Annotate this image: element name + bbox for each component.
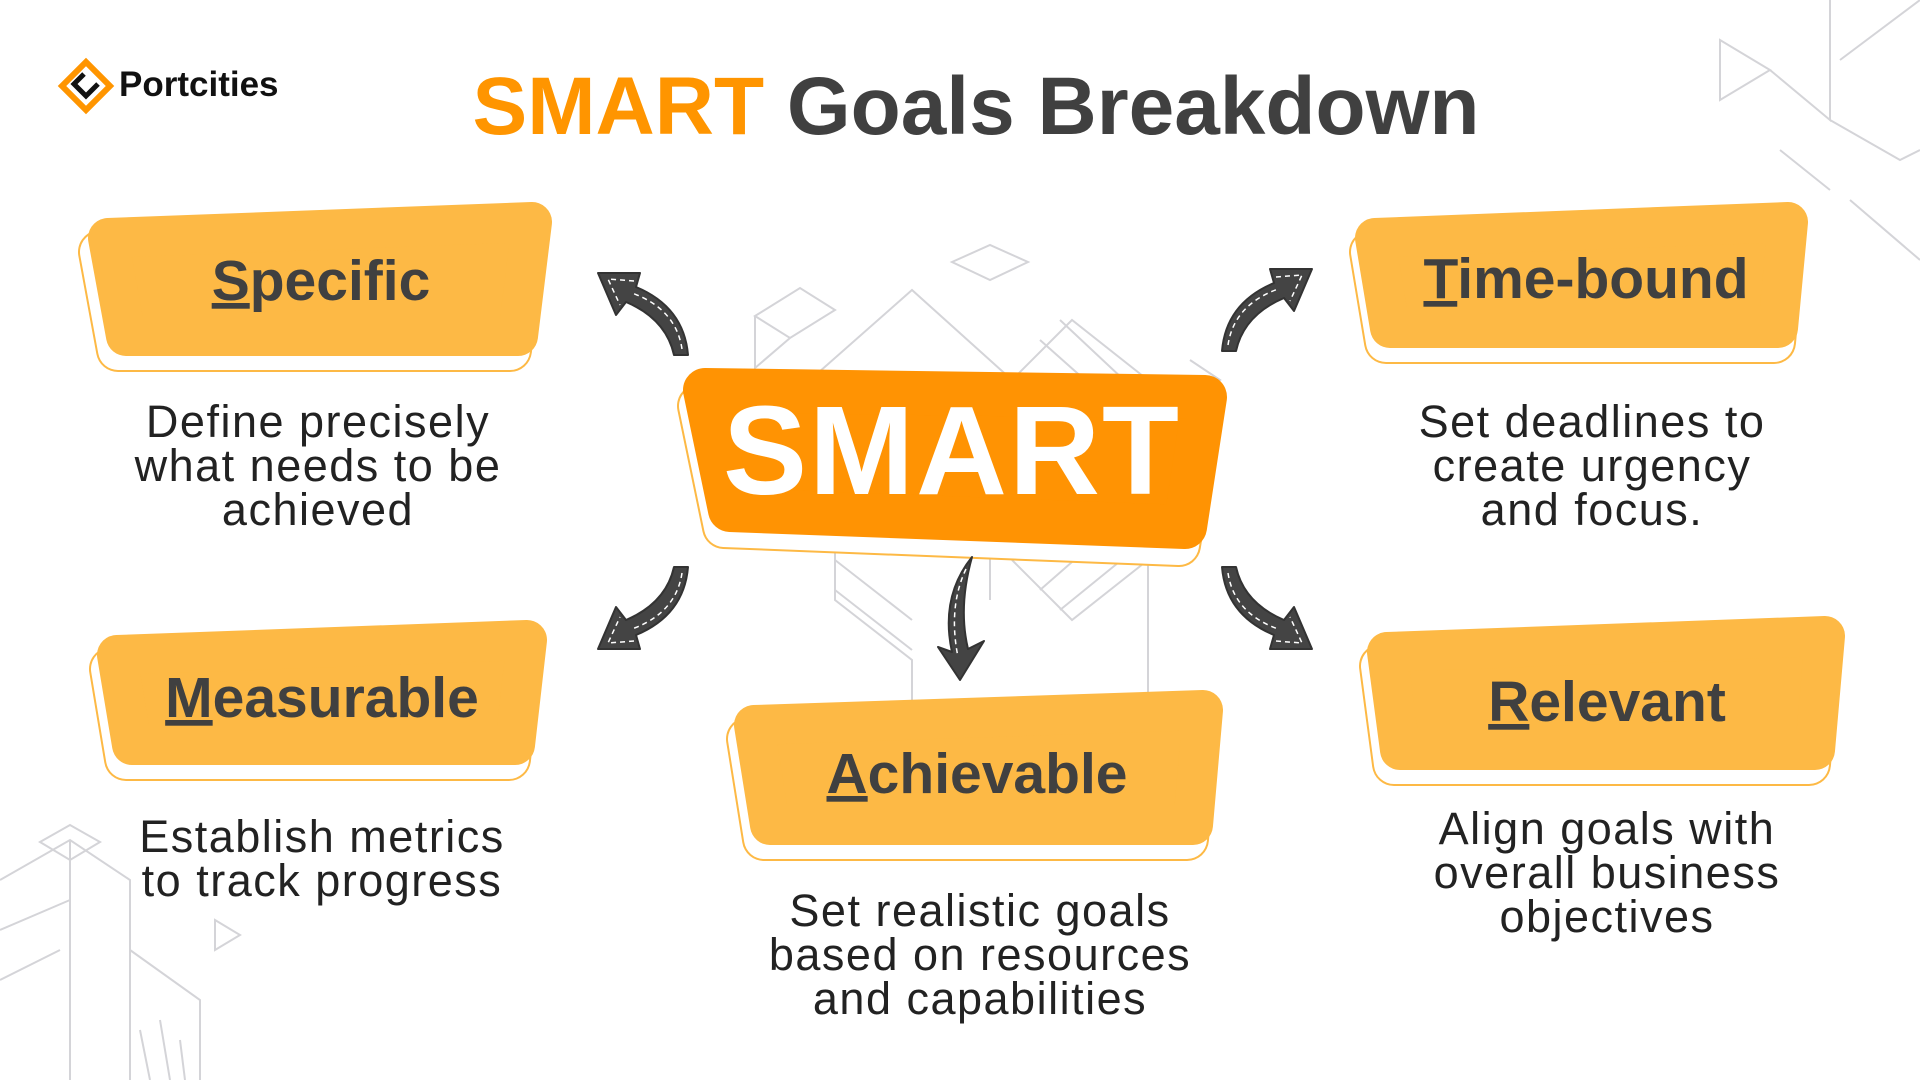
arrow: to Relevant bbox=[1222, 567, 1312, 649]
text: Relevant description: Align goals with bbox=[1439, 803, 1775, 854]
arrow: to Specific bbox=[598, 273, 688, 355]
card: Achievable bbox=[748, 710, 1203, 839]
card: Measurable: Measurable bbox=[165, 666, 479, 730]
text: Measurable description: to track progress bbox=[142, 855, 502, 906]
text: Time-bound description: and focus. bbox=[1481, 484, 1703, 535]
text: Achievable description: Set realistic goals bbox=[789, 885, 1171, 936]
text: Specific description: Define precisely bbox=[146, 396, 490, 447]
card: Time-bound: Time-bound bbox=[1423, 247, 1749, 311]
text: Relevant description: objectives bbox=[1499, 891, 1715, 942]
card: Specific bbox=[100, 222, 532, 350]
arrow: to Measurable bbox=[598, 567, 688, 649]
arrow: to Time-bound bbox=[1222, 269, 1312, 351]
text: Specific description: what needs to be bbox=[134, 440, 501, 491]
card: Time-bound bbox=[1371, 222, 1788, 342]
title: SMART Goals Breakdown bbox=[473, 61, 1479, 152]
text: Achievable description: based on resources bbox=[769, 929, 1191, 980]
card: Relevant bbox=[1381, 636, 1825, 764]
text: Measurable description: Establish metrics bbox=[139, 811, 505, 862]
text: Time-bound description: create urgency bbox=[1433, 440, 1751, 491]
card: Measurable bbox=[111, 640, 527, 759]
text: Specific description: achieved bbox=[222, 484, 414, 535]
text: Achievable description: and capabilities bbox=[813, 973, 1147, 1024]
card: Specific: Specific bbox=[212, 249, 430, 313]
center SMART badge: SMART bbox=[723, 380, 1181, 521]
icon: logo diamond bbox=[62, 62, 110, 110]
card: Relevant: Relevant bbox=[1488, 670, 1726, 734]
arrow: to Achievable bbox=[938, 557, 984, 680]
text: Relevant description: overall business bbox=[1434, 847, 1780, 898]
text: Time-bound description: Set deadlines to bbox=[1419, 396, 1765, 447]
logo bbox=[62, 62, 278, 110]
card: Achievable: Achievable bbox=[827, 742, 1127, 806]
logo: Portcities bbox=[119, 65, 278, 104]
